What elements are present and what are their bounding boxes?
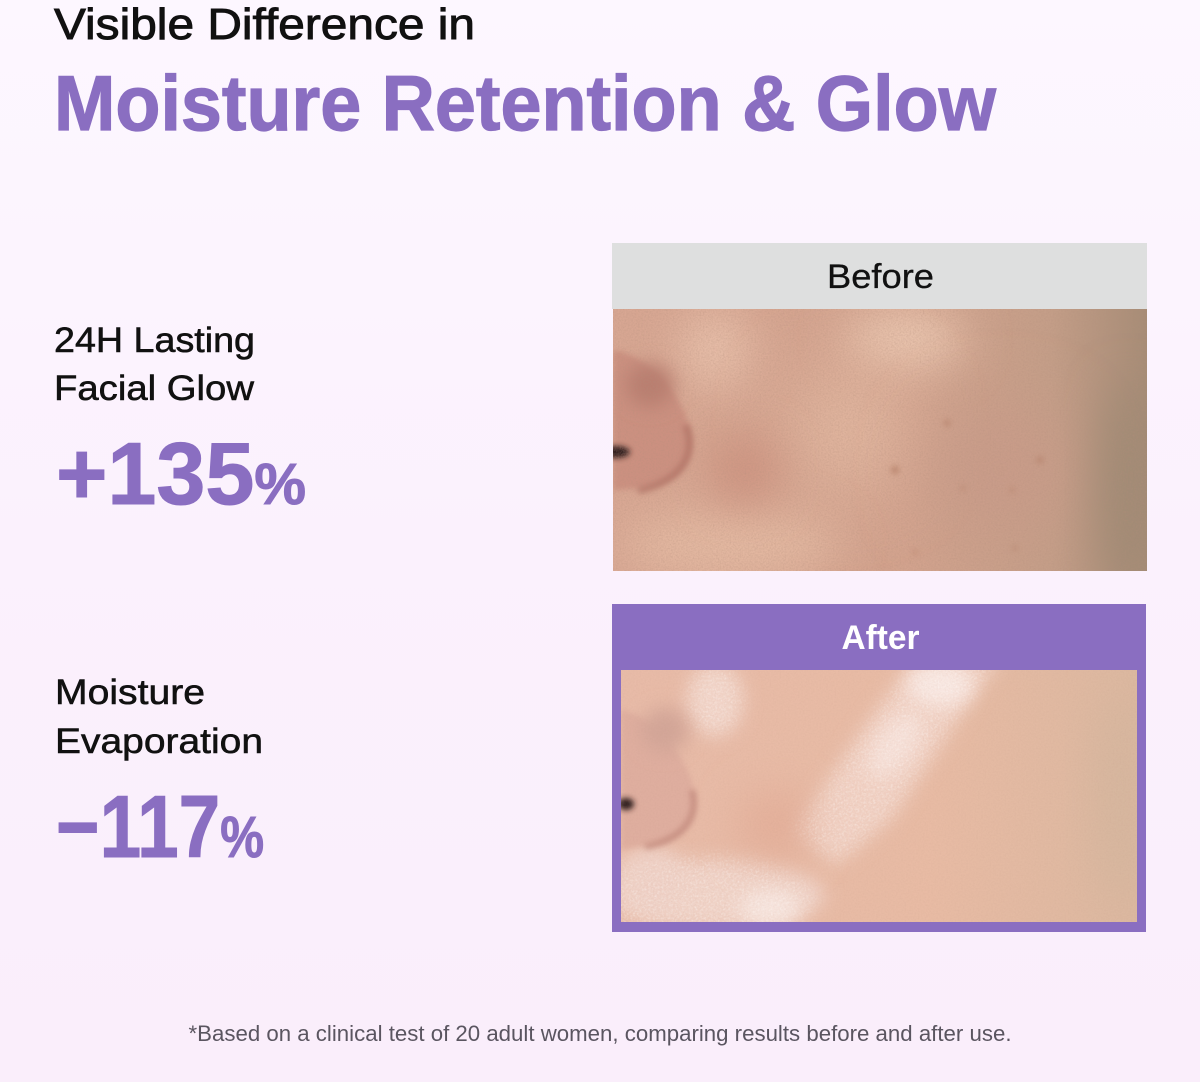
stat label: 24H Lasting xyxy=(54,321,255,360)
before header xyxy=(612,243,1147,309)
before header: Before xyxy=(827,258,934,296)
stat label xyxy=(55,673,263,761)
stat label: Facial Glow xyxy=(54,369,255,408)
stat label: Evaporation xyxy=(55,722,263,761)
stat: moisture evaporation xyxy=(55,673,264,876)
stat: facial glow xyxy=(54,321,306,523)
title xyxy=(54,0,996,147)
title line 1: Visible Difference in xyxy=(54,0,475,49)
stat value: +135% xyxy=(56,424,306,523)
after skin photo xyxy=(615,660,1145,929)
after header label: After xyxy=(842,619,920,657)
footnote: *Based on a clinical test of 20 adult women, comparing results before and after use. xyxy=(188,1021,1011,1046)
stat value: −117% xyxy=(56,777,264,876)
nose xyxy=(621,710,696,850)
nose xyxy=(613,350,692,490)
stat label xyxy=(54,321,255,408)
title line 2: Moisture Retention & Glow xyxy=(54,59,996,147)
stat label: Moisture xyxy=(55,673,205,712)
panel: before xyxy=(612,243,1147,571)
after frame xyxy=(612,604,1146,932)
panel: after xyxy=(612,604,1146,932)
blemishes xyxy=(890,420,1042,475)
before skin photo xyxy=(613,309,1147,571)
skin shine texture xyxy=(621,670,987,922)
